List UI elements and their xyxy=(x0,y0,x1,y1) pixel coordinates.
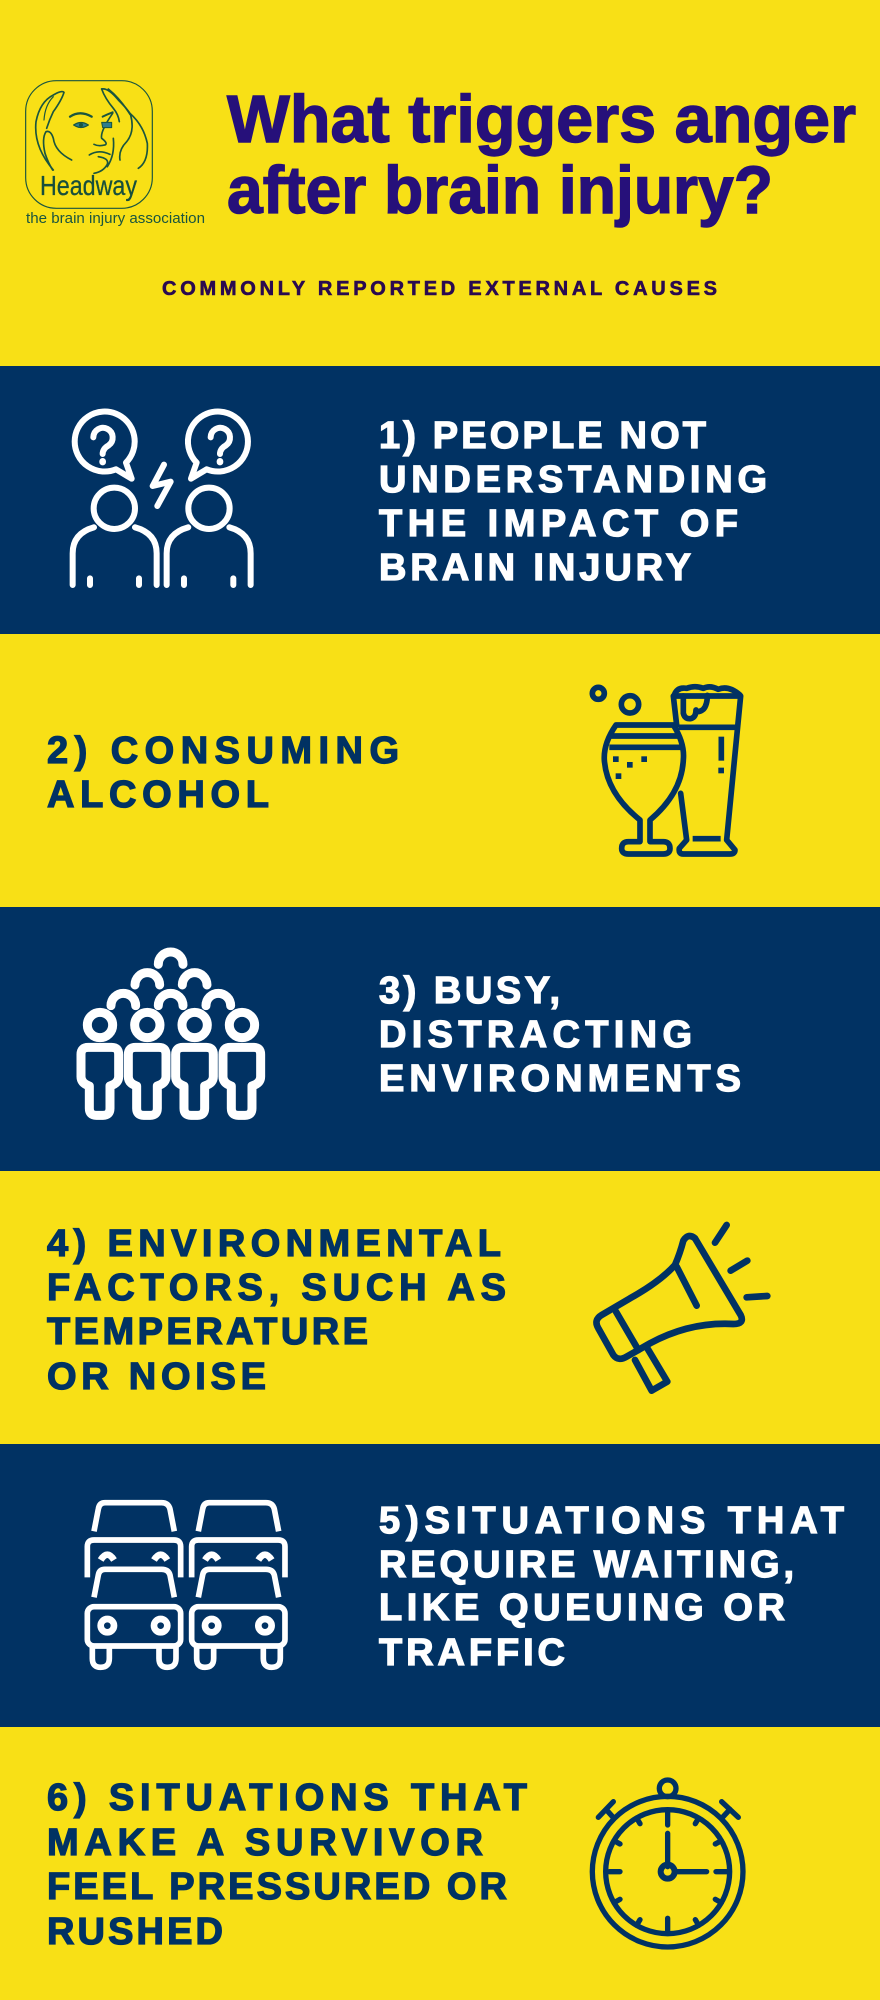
icon: megaphone xyxy=(596,1225,767,1391)
text: item 6: RUSHED xyxy=(47,1911,223,1953)
text: item 6: FEEL PRESSURED OR xyxy=(47,1866,507,1908)
text: item 1: 1) PEOPLE NOT xyxy=(379,415,706,457)
text: item 2 xyxy=(47,730,399,816)
title xyxy=(227,82,856,228)
panel 4: environmental factors xyxy=(0,1171,880,1444)
logo wordmark: Headway xyxy=(40,170,137,201)
panel 2: consuming alcohol xyxy=(0,634,880,907)
text: item 3: 3) BUSY, xyxy=(379,970,560,1012)
icon: traffic cars xyxy=(87,1503,285,1667)
icon: crowd xyxy=(81,952,261,1115)
panel 5: situations requiring waiting xyxy=(0,1444,880,1727)
text: item 4: FACTORS, SUCH AS xyxy=(47,1267,506,1309)
text: item 5: LIKE QUEUING OR xyxy=(379,1587,785,1629)
panel 6: pressured or rushed xyxy=(0,1727,880,2000)
text: item 1: BRAIN INJURY xyxy=(379,547,691,589)
icon: beer glasses xyxy=(592,687,741,854)
subtitle: COMMONLY REPORTED EXTERNAL CAUSES xyxy=(162,278,717,300)
text: item 2: ALCOHOL xyxy=(47,774,269,816)
title: What triggers anger xyxy=(227,82,856,157)
text: item 5: 5)SITUATIONS THAT xyxy=(379,1500,844,1542)
title: after brain injury? xyxy=(227,153,773,228)
icon: stopwatch xyxy=(592,1780,743,1947)
text: item 6 xyxy=(47,1777,527,1953)
text: item 1 xyxy=(379,415,767,589)
text: item 4: 4) ENVIRONMENTAL xyxy=(47,1223,501,1265)
text: item 5 xyxy=(379,1500,844,1674)
text: item 4 xyxy=(47,1223,506,1398)
text: item 6: 6) SITUATIONS THAT xyxy=(47,1777,527,1819)
text: item 6: MAKE A SURVIVOR xyxy=(47,1822,483,1864)
icon: two people with question bubbles xyxy=(73,412,251,585)
text: item 3: ENVIRONMENTS xyxy=(379,1058,741,1100)
text: item 4: OR NOISE xyxy=(47,1356,266,1398)
text: item 3 xyxy=(379,970,741,1100)
panel 1: people not understanding xyxy=(0,366,880,634)
text: item 4: TEMPERATURE xyxy=(47,1311,368,1353)
text: item 1: THE IMPACT OF xyxy=(379,503,738,545)
text: item 3: DISTRACTING xyxy=(379,1014,692,1056)
text: item 5: REQUIRE WAITING, xyxy=(379,1544,794,1586)
text: item 1: UNDERSTANDING xyxy=(379,459,767,501)
text: item 5: TRAFFIC xyxy=(379,1632,565,1674)
panel 3: busy environments xyxy=(0,907,880,1171)
text: item 2: 2) CONSUMING xyxy=(47,730,399,772)
logo: Headway xyxy=(26,81,205,227)
logo tagline: the brain injury association xyxy=(26,210,205,227)
